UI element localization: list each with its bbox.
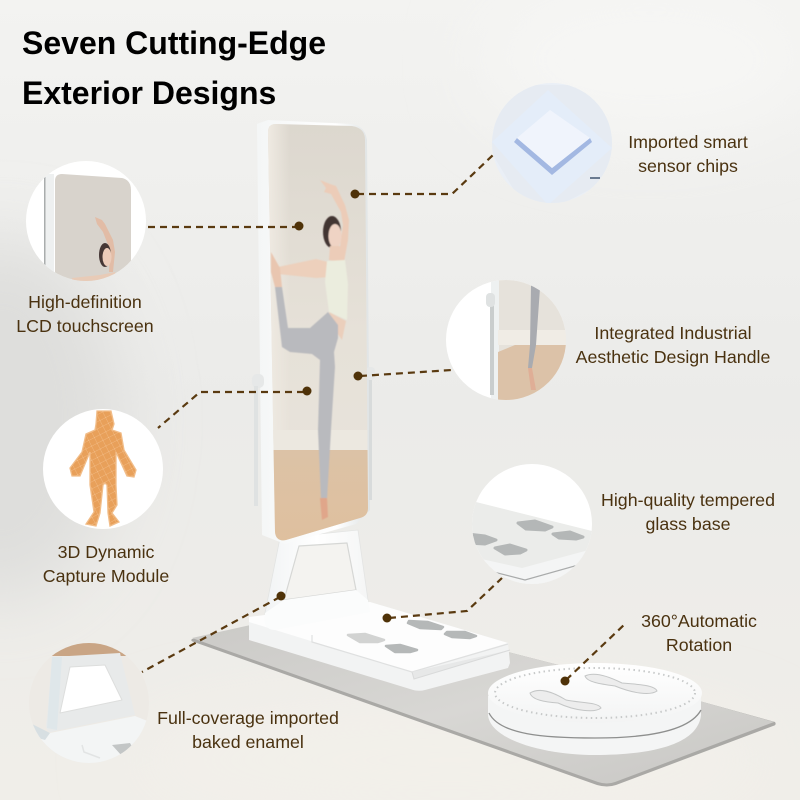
label: automatic rotation: Rotation bbox=[666, 635, 732, 655]
label: handle: Aesthetic Design Handle bbox=[576, 347, 770, 367]
callout: capture module bbox=[158, 386, 312, 428]
label: automatic rotation: 360°Automatic bbox=[641, 611, 757, 631]
label: sensor chips: sensor chips bbox=[638, 156, 738, 176]
callout: LCD touchscreen bbox=[148, 222, 304, 230]
stand bracket bbox=[264, 530, 370, 630]
title: Seven Cutting-Edge bbox=[22, 25, 326, 61]
title: Exterior Designs bbox=[22, 75, 276, 111]
label: glass base: High-quality tempered bbox=[601, 490, 775, 510]
label: glass base: glass base bbox=[645, 514, 731, 534]
trousers bbox=[275, 287, 338, 500]
base unit bbox=[249, 602, 510, 691]
label: capture module: Capture Module bbox=[43, 566, 169, 586]
inset: LCD touchscreen bbox=[26, 161, 146, 285]
sensor pads bbox=[348, 621, 476, 652]
inset: integrated handle bbox=[446, 280, 570, 402]
smart mirror product bbox=[249, 120, 702, 755]
label: handle: Integrated Industrial bbox=[594, 323, 752, 343]
callout: glass base bbox=[382, 578, 502, 622]
inset: baked enamel stand bbox=[33, 643, 146, 763]
icon: human mesh figure bbox=[70, 411, 136, 526]
label: capture module: 3D Dynamic bbox=[58, 542, 154, 562]
raised foot bbox=[271, 252, 282, 287]
title bbox=[22, 25, 326, 111]
inset: 3D dynamic capture module bbox=[43, 409, 163, 529]
callout: baked enamel bbox=[142, 592, 286, 672]
top bbox=[325, 260, 348, 320]
label: baked enamel: Full-coverage imported bbox=[157, 708, 339, 728]
callout: sensor chips bbox=[350, 155, 493, 198]
mirror screen with dancer bbox=[268, 124, 368, 540]
label: baked enamel: baked enamel bbox=[192, 732, 304, 752]
callout: automatic rotation bbox=[560, 623, 626, 686]
inset: imported smart sensor chip bbox=[490, 83, 615, 205]
lower arm bbox=[278, 259, 330, 278]
rotating turntable bbox=[488, 663, 702, 755]
label: LCD touchscreen: High-definition bbox=[28, 292, 142, 312]
callout: handle bbox=[354, 370, 452, 380]
ballet feet bbox=[320, 498, 328, 520]
footprints bbox=[530, 690, 601, 711]
inset: tempered glass base bbox=[472, 464, 592, 584]
side handles bbox=[252, 367, 375, 506]
mirror frame bbox=[257, 120, 370, 544]
stand foot bbox=[264, 590, 370, 630]
label: sensor chips: Imported smart bbox=[628, 132, 748, 152]
raised arm bbox=[320, 180, 349, 262]
glass base plate bbox=[191, 624, 776, 786]
hair and face bbox=[323, 216, 341, 248]
label: LCD touchscreen: LCD touchscreen bbox=[16, 316, 154, 336]
